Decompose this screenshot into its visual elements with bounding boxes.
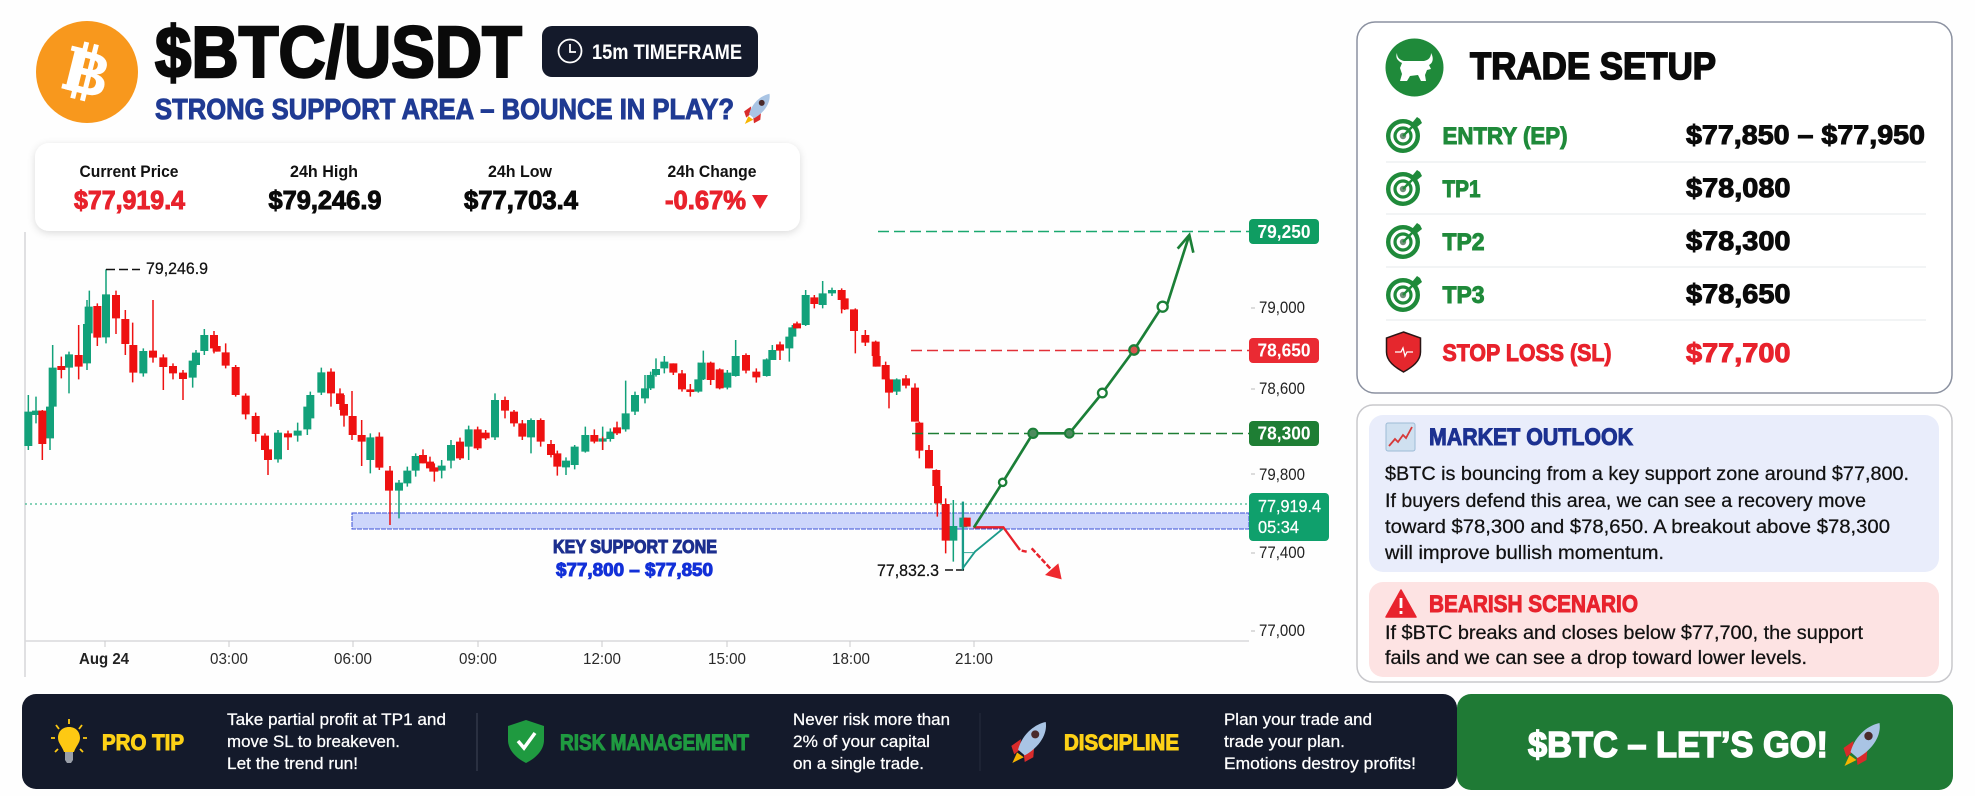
- candles: left section: [28, 269, 495, 525]
- high marker 79,246.9: 79,246.9: [146, 260, 208, 278]
- heading: risk management: RISK MANAGEMENT: [560, 730, 749, 755]
- text: discipline: [1224, 711, 1416, 773]
- text: bearish body: [1385, 623, 1864, 669]
- price axis labels: [1251, 299, 1305, 640]
- text: risk management: 2% of your capital: [793, 733, 930, 751]
- current price tag: 77,919.4: [1258, 496, 1321, 516]
- text: risk management: Never risk more than: [793, 711, 950, 729]
- box: bearish scenario: [1369, 582, 1939, 677]
- current price tag: 05:34: [1258, 517, 1299, 537]
- text: pro tip: move SL to breakeven.: [227, 733, 400, 751]
- arrow: teal low path: [963, 502, 1003, 568]
- text: outlook body: toward $78,300 and $78,650. A breakout above $78,300: [1385, 517, 1890, 538]
- button: lets go: $BTC – LET’S GO!: [1528, 724, 1828, 765]
- timeframe badge: [542, 26, 758, 77]
- row: tp2: [1388, 223, 1790, 257]
- icon: bitcoin coin: [36, 21, 138, 123]
- text: outlook body: $BTC is bouncing from a key support zone around $77,800.: [1385, 464, 1909, 485]
- stat: 24h change: 24h Change: [668, 162, 756, 181]
- text: discipline: Plan your trade and: [1224, 711, 1372, 729]
- text: pro tip: [227, 711, 446, 773]
- key support zone label: $77,800 – $77,850: [556, 560, 713, 580]
- stat: 24h high: [268, 162, 382, 215]
- icon: rocket: [1011, 722, 1046, 763]
- stat: current price: [74, 162, 186, 215]
- row: tp3: TP3: [1442, 282, 1484, 309]
- stat: current price: $77,919.4: [74, 185, 186, 215]
- text: outlook body: [1384, 464, 1909, 564]
- time axis labels: 18:00: [832, 651, 870, 668]
- time axis labels: 12:00: [583, 651, 621, 668]
- panel: trade setup: [1357, 22, 1952, 393]
- stat: current price: Current Price: [80, 162, 178, 181]
- icon: bull: [1386, 38, 1444, 96]
- time axis labels: 06:00: [334, 651, 372, 668]
- row: tp2: TP2: [1442, 229, 1484, 256]
- current price dotted line: [25, 503, 1250, 505]
- row: tp3: [1388, 276, 1790, 310]
- text: bearish body: If $BTC breaks and closes below $77,700, the support: [1385, 623, 1864, 644]
- stat: 24h change: -0.67%: [665, 185, 746, 215]
- level line: 79,250: 79,250: [1258, 222, 1310, 242]
- panel: outlook and scenario: [1357, 405, 1952, 682]
- row: tp2: $78,300: [1686, 226, 1790, 256]
- low marker 77,832.3: 77,832.3: [877, 562, 939, 580]
- time axis labels: Aug 24: [79, 651, 129, 668]
- level line: 78,650: 78,650: [1258, 340, 1310, 360]
- arrow: bearish projection: [973, 527, 1062, 579]
- heading: market outlook: MARKET OUTLOOK: [1429, 424, 1634, 451]
- stat: 24h low: 24h Low: [488, 162, 553, 181]
- button: lets go: [1457, 694, 1953, 790]
- candles: right section: [505, 281, 967, 570]
- text: outlook body: If buyers defend this area, we can see a recovery move: [1385, 491, 1866, 512]
- row: tp3: $78,650: [1686, 279, 1790, 309]
- price axis labels: 78,600: [1259, 380, 1305, 398]
- price axis labels: 77,000: [1259, 622, 1305, 640]
- icon: rising chart: [1386, 423, 1415, 451]
- level line: 78,300: [912, 421, 1319, 446]
- time axis labels: 15:00: [708, 651, 746, 668]
- row: tp1: [1388, 170, 1790, 204]
- box: market outlook: [1369, 415, 1939, 572]
- panel: price statistics: [35, 143, 800, 231]
- text: discipline: trade your plan.: [1224, 733, 1345, 751]
- high marker 79,246.9: [106, 260, 208, 278]
- row: tp1: $78,080: [1686, 173, 1790, 203]
- row: entry: [1388, 117, 1925, 151]
- stat: 24h high: 24h High: [290, 162, 358, 181]
- arrow: bullish projection path: [974, 235, 1193, 527]
- chart: BTC candlesticks: [25, 219, 1329, 677]
- text: discipline: Emotions destroy profits!: [1224, 755, 1416, 773]
- text: pro tip: Let the trend run!: [227, 755, 358, 773]
- heading: pro tip: PRO TIP: [102, 730, 184, 755]
- key support zone band: [352, 513, 1249, 529]
- text: pro tip: Take partial profit at TP1 and: [227, 711, 446, 729]
- heading: bearish scenario: BEARISH SCENARIO: [1429, 591, 1638, 618]
- row: stop loss: [1386, 332, 1790, 372]
- row: entry: $77,850 – $77,950: [1686, 120, 1925, 150]
- subtitle: STRONG SUPPORT AREA – BOUNCE IN PLAY?: [155, 94, 734, 126]
- stat: 24h low: [464, 162, 579, 215]
- icon: warning: [1386, 590, 1416, 617]
- row: tp1: TP1: [1442, 176, 1480, 203]
- time axis labels: 03:00: [210, 651, 248, 668]
- row: stop loss: STOP LOSS (SL): [1442, 340, 1612, 367]
- text: bearish body: fails and we can see a drop toward lower levels.: [1385, 648, 1807, 669]
- icon: bitcoin coin: B: [58, 35, 117, 112]
- title: $BTC/USDT: [155, 13, 522, 93]
- level line: 78,300: 78,300: [1258, 424, 1310, 444]
- text: outlook body: will improve bullish momentum.: [1384, 543, 1664, 564]
- panel: tips bar: [22, 694, 1457, 789]
- level line: 79,250: [878, 219, 1319, 244]
- key support zone label: [553, 537, 717, 580]
- time axis labels: 21:00: [955, 651, 993, 668]
- price axis labels: 79,000: [1259, 299, 1305, 317]
- key support zone label: KEY SUPPORT ZONE: [553, 537, 717, 557]
- row: stop loss: $77,700: [1686, 338, 1790, 368]
- time axis labels: 09:00: [459, 651, 497, 668]
- heading: trade setup: TRADE SETUP: [1470, 46, 1716, 88]
- price axis labels: 77,400: [1259, 544, 1305, 562]
- current price tag: [1249, 493, 1329, 541]
- time axis labels: [79, 651, 993, 668]
- text: risk management: [793, 711, 950, 773]
- stat: 24h high: $79,246.9: [268, 185, 382, 215]
- row: entry: ENTRY (EP): [1442, 123, 1568, 150]
- stat: 24h low: $77,703.4: [464, 185, 579, 215]
- stat: 24h change: [665, 162, 768, 215]
- icon: green shield: [508, 720, 544, 763]
- timeframe badge: 15m TIMEFRAME: [592, 41, 742, 64]
- icon: lightbulb: [51, 719, 87, 763]
- text: risk management: on a single trade.: [793, 755, 924, 773]
- price axis labels: 79,800: [1259, 466, 1305, 484]
- heading: discipline: DISCIPLINE: [1064, 730, 1179, 755]
- level line: 78,650: [911, 338, 1319, 363]
